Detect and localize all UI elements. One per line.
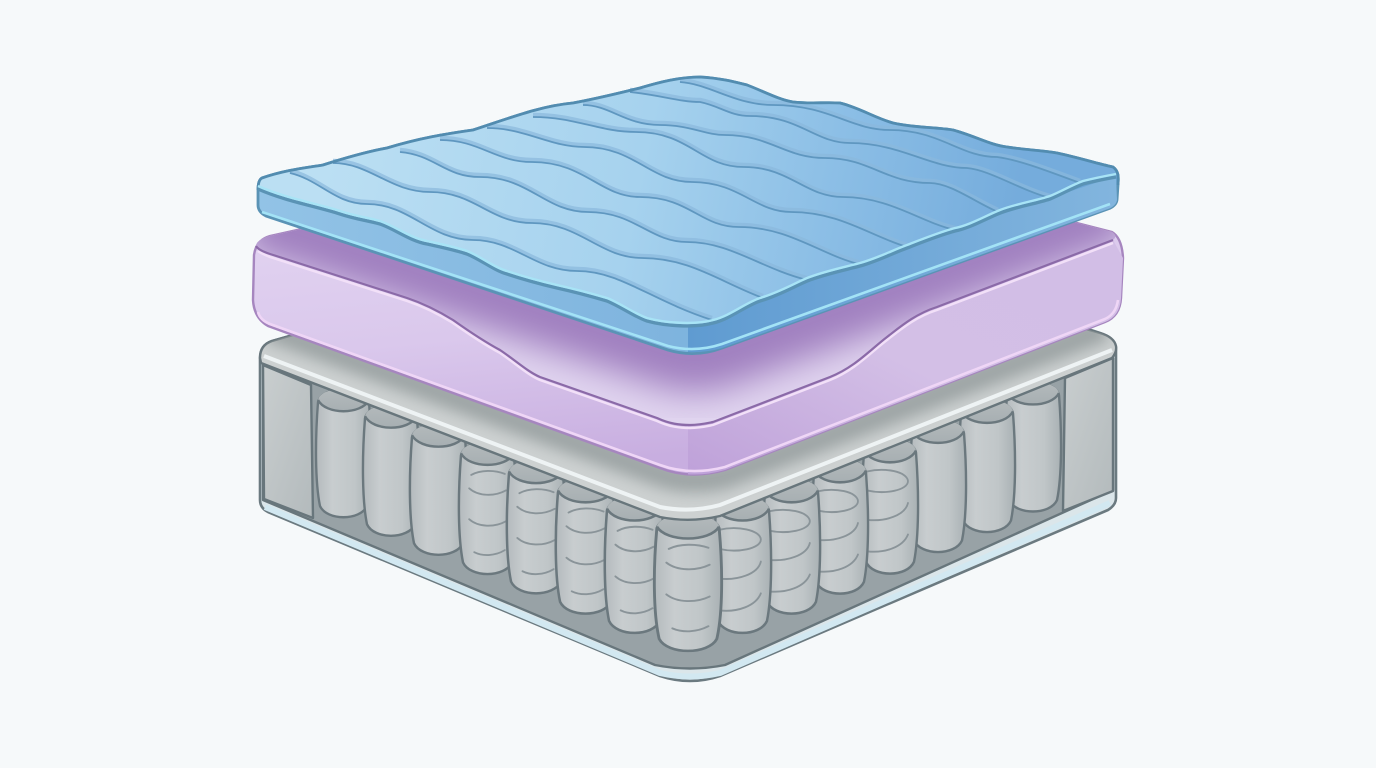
topper front edge dark line — [258, 177, 1116, 326]
middle layer: purple foam — [252, 222, 1124, 476]
topper lower edge highlight — [262, 204, 1110, 349]
base top strip — [260, 220, 1116, 520]
coil 8 center — [654, 515, 722, 651]
coil 1 — [316, 389, 371, 517]
base top strip white highlight — [264, 350, 1112, 510]
coil 7 — [605, 497, 664, 633]
coil 12 — [862, 439, 918, 574]
bottom layer: pocket spring base — [258, 328, 1118, 682]
top layer: blue quilted topper — [258, 77, 1118, 354]
right end panel — [1063, 358, 1113, 511]
coil 13 — [910, 420, 966, 552]
foam body side — [253, 150, 1123, 475]
base bottom rim highlight — [265, 503, 1110, 676]
illustration: exploded mattress layers — [252, 76, 1124, 682]
coil 4 — [459, 442, 516, 574]
spring coils row — [316, 382, 1061, 651]
coil 15 — [1005, 382, 1061, 512]
base strip shadow — [268, 328, 1105, 480]
quilting wave lines shadow — [290, 80, 1080, 318]
base cavity floor — [263, 358, 1113, 668]
topper back edge outline — [258, 77, 1118, 190]
coil 3 — [410, 424, 467, 555]
left end panel — [263, 365, 313, 518]
foam fold line — [256, 240, 1113, 425]
coil 10 — [763, 479, 820, 614]
foam fold pink highlight — [258, 243, 1113, 428]
foam bottom highlight — [258, 300, 1118, 471]
foam top surface — [256, 150, 1115, 425]
coil 6 — [556, 479, 615, 614]
coil 5 — [507, 460, 565, 593]
topper top surface — [258, 77, 1117, 325]
topper front edge highlight — [258, 174, 1116, 323]
coil 2 — [363, 405, 419, 536]
coil 11 — [812, 459, 868, 594]
coil 9 — [714, 497, 771, 633]
quilting wave lines — [290, 82, 1080, 320]
foam shadow below topper — [250, 205, 1120, 357]
base outer shell — [260, 200, 1116, 681]
topper body — [258, 77, 1118, 354]
foam right side shade — [660, 240, 1123, 475]
topper right side shade — [688, 176, 1117, 352]
coil 14 — [959, 400, 1015, 532]
